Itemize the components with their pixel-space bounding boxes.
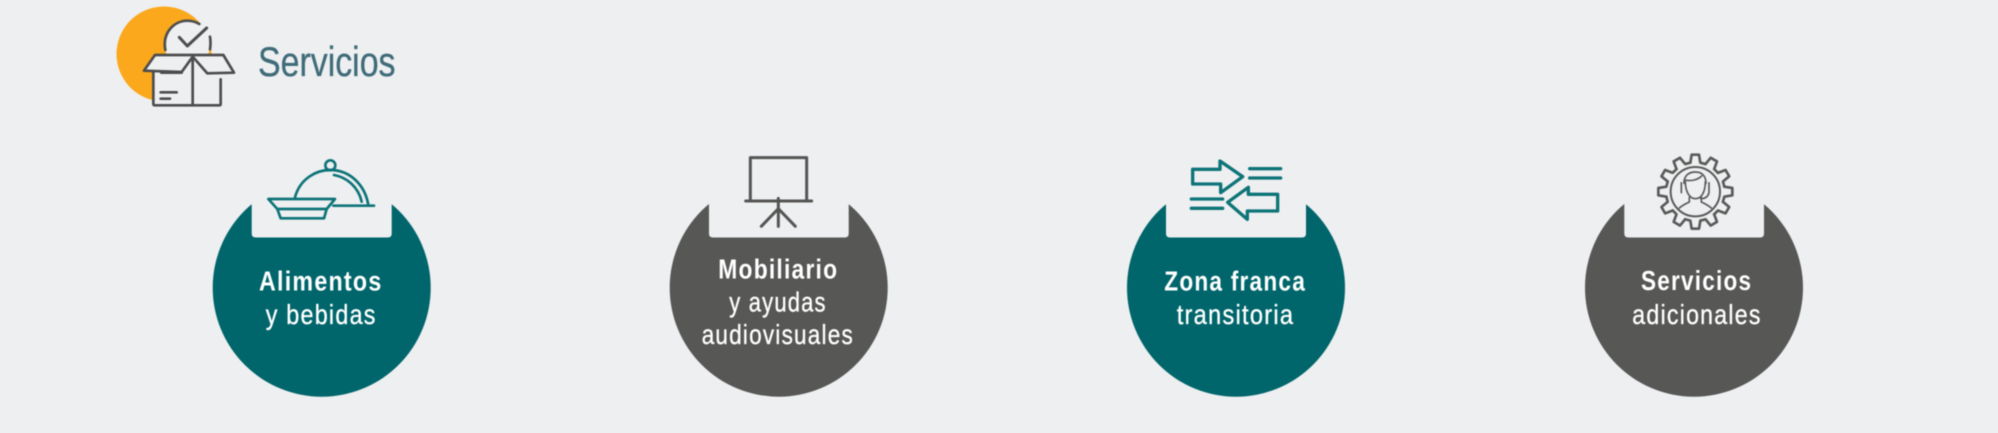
panel: Alimentos y bebidas [213,160,431,397]
icon: box with check mark on orange circle [116,6,234,105]
label: Servicios adicionales: Servicios [1641,265,1752,296]
label: Mobiliario y ayudas audiovisuales: Mobiliario [718,253,838,284]
heading: Servicios: Servicios [258,38,396,85]
label: Zona franca transitoria [1164,266,1306,330]
header: Servicios [116,6,396,105]
label: Mobiliario y ayudas audiovisuales [702,253,854,350]
panel: Mobiliario y ayudas audiovisuales [670,158,888,397]
teal circle with notch [213,170,431,397]
label: Mobiliario y ayudas audiovisuales: audiovisuales [702,319,854,350]
teal circle with notch [1127,170,1345,397]
label: Alimentos y bebidas: Alimentos [259,266,382,296]
panel: Servicios adicionales [1585,155,1803,397]
label: Servicios adicionales: adicionales [1632,299,1762,330]
label: Zona franca transitoria: Zona franca [1164,266,1306,296]
label: Alimentos y bebidas: y bebidas [266,299,377,330]
icon: gear with headset operator [1658,155,1732,229]
icon: projection screen [746,158,812,226]
label: Mobiliario y ayudas audiovisuales: y ayudas [729,287,827,318]
icon: opposing arrows [1191,161,1281,219]
gray circle with notch [1585,170,1803,397]
label: Zona franca transitoria: transitoria [1177,299,1294,330]
label: Alimentos y bebidas [259,266,382,330]
icon: food cloche and dish [268,160,374,218]
gray circle with notch [670,170,888,397]
label: Servicios adicionales [1632,265,1762,330]
panel: Zona franca transitoria [1127,161,1345,397]
